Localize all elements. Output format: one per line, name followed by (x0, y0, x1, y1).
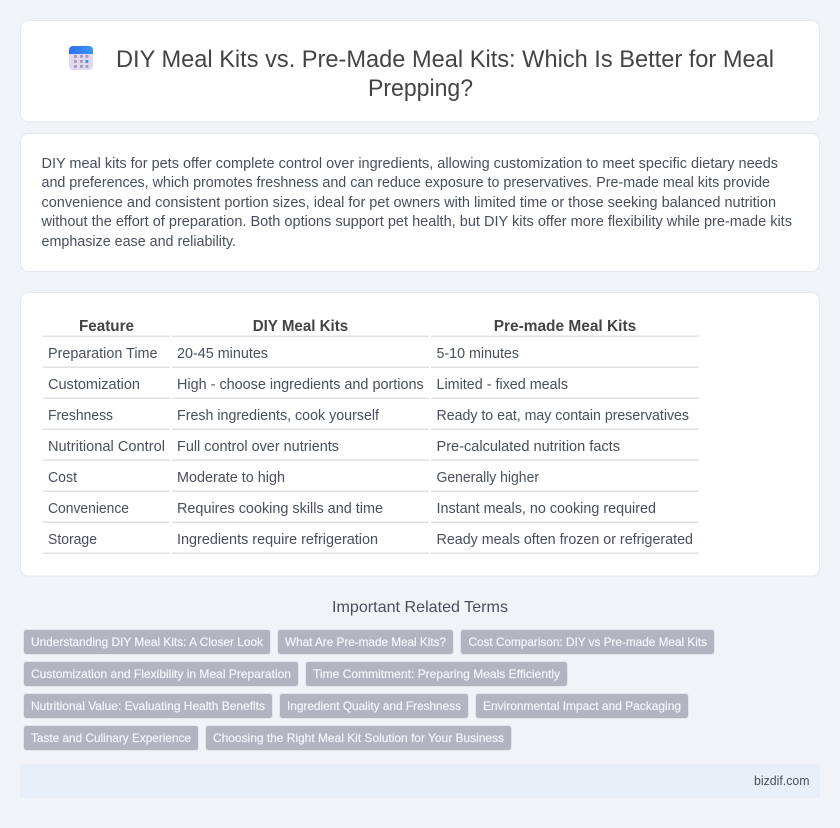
row: customization: Customization (48, 377, 140, 393)
table header: Pre-made Meal Kits (494, 318, 636, 335)
title: DIY Meal Kits vs. Pre-Made Meal Kits: Which Is Better for Meal (116, 46, 774, 73)
row: customization: Limited - fixed meals (436, 377, 568, 393)
row: cost (48, 470, 539, 486)
text block: summary: and preferences, which promotes freshness and can reduce exposure to preservatives. Pre-made meal kits provide (42, 175, 770, 191)
row: storage: Storage (48, 532, 97, 548)
row: preparation time: Preparation Time (48, 346, 158, 362)
row: customization (48, 377, 568, 393)
tag (206, 726, 512, 750)
row: convenience (48, 501, 656, 517)
row: convenience: Instant meals, no cooking required (436, 501, 656, 517)
tag: What Are Pre-made Meal Kits? (285, 635, 446, 649)
tag: Environmental Impact and Packaging (483, 699, 681, 713)
row: preparation time: 20-45 minutes (177, 346, 268, 362)
row: freshness: Fresh ingredients, cook yourself (177, 408, 380, 424)
tags: related terms (24, 630, 714, 750)
row: freshness: Freshness (48, 408, 113, 424)
tag (24, 662, 298, 686)
row: storage: Ingredients require refrigeration (177, 532, 378, 548)
tag (24, 630, 270, 654)
tag: Ingredient Quality and Freshness (287, 699, 461, 713)
tag: Choosing the Right Meal Kit Solution for Your Business (213, 731, 504, 745)
row: preparation time (48, 346, 519, 362)
row: convenience: Requires cooking skills and time (177, 501, 383, 517)
panel: comparison table (20, 292, 820, 576)
tag (24, 726, 198, 750)
tag (460, 630, 714, 654)
tag: Cost Comparison: DIY vs Pre-made Meal Kits (468, 635, 707, 649)
row: convenience: Convenience (48, 501, 129, 517)
table header (79, 318, 636, 335)
row: preparation time: 5-10 minutes (436, 346, 519, 362)
footer (20, 764, 820, 798)
row: storage: Ready meals often frozen or refrigerated (436, 532, 693, 548)
title: Prepping? (368, 75, 473, 102)
tag (306, 662, 568, 686)
row: freshness (48, 408, 689, 424)
text block: summary: without the effort of preparation. Both options support pet health, but DIY kits offer more flexibility while pre-made kits (40, 214, 792, 230)
row: cost: Moderate to high (177, 470, 285, 486)
tag (476, 694, 688, 718)
row: nutritional control: Nutritional Control (48, 439, 165, 455)
text block: summary: emphasize ease and reliability. (42, 234, 236, 250)
row: customization: High - choose ingredients and portions (177, 377, 424, 393)
panel: header (20, 20, 820, 122)
title (116, 46, 774, 102)
tag (24, 694, 272, 718)
text block: summary: convenience and consistent portion sizes, ideal for pet owners with limited time or those seeking balanced nutrition (42, 195, 776, 211)
row: nutritional control (48, 439, 620, 455)
row: freshness: Ready to eat, may contain preservatives (436, 408, 689, 424)
text block: summary: DIY meal kits for pets offer complete control over ingredients, allowing customization to meet specific dietary needs (42, 156, 778, 172)
row: cost: Cost (48, 470, 77, 486)
tag: Understanding DIY Meal Kits: A Closer Look (31, 635, 264, 649)
icon: calendar (69, 46, 93, 70)
table header: Feature (79, 318, 134, 335)
heading: important related terms: Important Related Terms (332, 599, 508, 616)
row: nutritional control: Full control over nutrients (177, 439, 339, 455)
tag: Time Commitment: Preparing Meals Efficiently (313, 667, 560, 681)
panel: summary paragraph (20, 134, 820, 272)
row: storage (48, 532, 693, 548)
footer: bizdif.com (754, 773, 810, 788)
tag: Customization and Flexibility in Meal Preparation (31, 667, 291, 681)
tag: Nutritional Value: Evaluating Health Benefits (31, 699, 265, 713)
table header: DIY Meal Kits (253, 318, 348, 335)
row: nutritional control: Pre-calculated nutrition facts (436, 439, 620, 455)
tag: Taste and Culinary Experience (31, 731, 191, 745)
text block: summary (40, 156, 792, 250)
row: cost: Generally higher (436, 470, 539, 486)
tag (280, 694, 468, 718)
tag (278, 630, 454, 654)
